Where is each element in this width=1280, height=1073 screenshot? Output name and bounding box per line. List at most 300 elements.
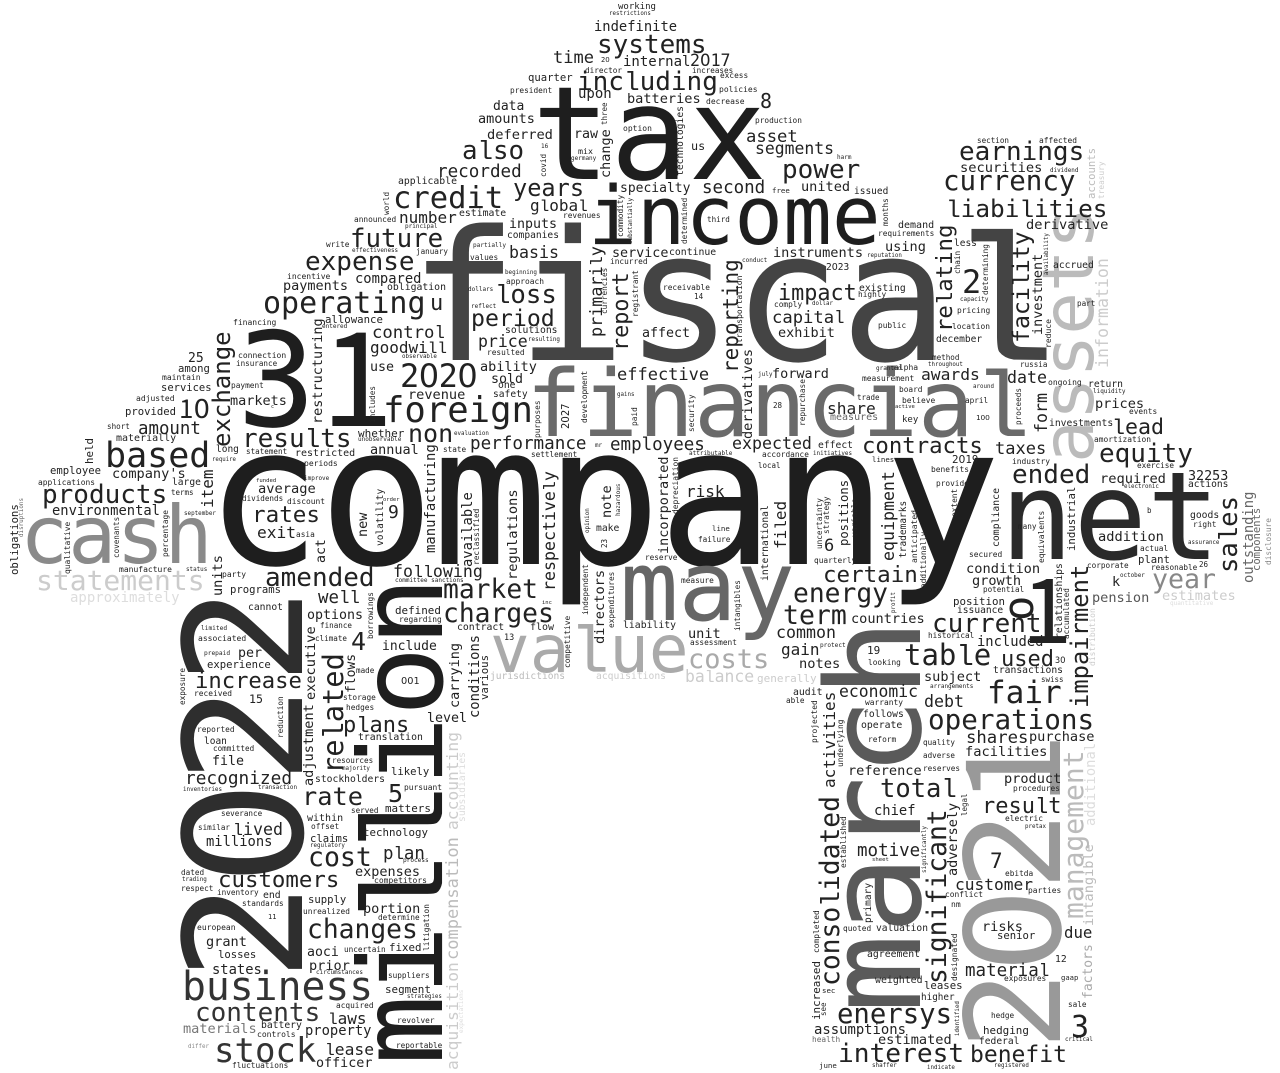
cluster: right eave words: relationships: [1054, 563, 1065, 639]
word: assets: assets: [1027, 207, 1110, 463]
cluster: left wall words: increase: [195, 668, 302, 694]
cluster: right eave words: october: [1120, 573, 1145, 579]
cluster: left roof words: provided: [125, 406, 176, 418]
cluster: roof peak words: companies: [507, 230, 559, 241]
cluster: central words: reclassified: [472, 509, 481, 565]
cluster: left roof words: obligations: [8, 504, 21, 575]
cluster: left roof words: require: [212, 457, 237, 463]
cluster: left wall words: rate: [302, 782, 363, 811]
cluster: left wall words: subsidiaries: [457, 752, 468, 822]
cluster: left roof words: covenants: [112, 517, 121, 558]
cluster: right wall words: assumptions: [814, 1022, 906, 1038]
cluster: right of centre words: countries: [851, 611, 925, 627]
cluster: right wall words: procedures: [1013, 784, 1060, 793]
cluster: right eave words: year: [1152, 564, 1216, 595]
cluster: left wall words: suppliers: [388, 971, 430, 980]
cluster: roof peak words: free: [772, 186, 790, 195]
cluster: left wall words: prepaid: [204, 650, 230, 657]
cluster: left roof words: amount: [138, 419, 201, 439]
cluster: right wall words: adversely: [945, 803, 961, 876]
cluster: right of centre words: notes: [799, 656, 840, 672]
cluster: right of centre words: trademarks: [898, 501, 909, 558]
cluster: roof peak words: january: [416, 247, 448, 256]
cluster: left roof words: funded: [256, 478, 276, 484]
cluster: roof peak words: effectiveness: [352, 248, 398, 254]
cluster: right of centre words: 28: [773, 401, 783, 410]
cluster: upper right words: relating: [932, 225, 959, 332]
cluster: right wall words: completed: [812, 910, 821, 953]
cluster: left roof words: operating: [263, 286, 426, 321]
cluster: left roof words: disruptions: [19, 498, 25, 537]
cluster: right eave words: [993, 415, 1273, 708]
word: may: may: [620, 530, 795, 643]
cluster: roof peak words: time: [553, 48, 594, 68]
cluster: central words: impact: [778, 281, 857, 306]
cluster: central words: use: [370, 360, 394, 375]
cluster: left roof words: maintain: [162, 373, 201, 382]
cluster: left wall words: revolver: [397, 1016, 435, 1025]
cluster: right of centre words: key: [902, 415, 919, 425]
cluster: roof peak words: 2017: [690, 51, 731, 70]
cluster: right of centre words: contracts: [862, 433, 983, 459]
cluster: right wall words: agreement: [867, 949, 920, 960]
cluster: left wall words: related: [316, 653, 352, 774]
word: tax: tax: [532, 58, 767, 210]
cluster: left wall words: standards: [242, 899, 284, 908]
cluster: left wall words: customers: [218, 867, 339, 893]
cluster: roof peak words: germany: [571, 155, 597, 162]
cluster: upper right words: accrued: [1053, 260, 1094, 271]
cluster: left wall words: made: [356, 666, 375, 675]
cluster: right eave words: components: [1251, 508, 1263, 571]
cluster: right wall words: operate: [861, 720, 902, 731]
cluster: left wall words: similar: [198, 823, 230, 832]
cluster: upper right words: liquidity: [1093, 388, 1126, 395]
cluster: left roof words: short: [107, 422, 130, 431]
cluster: left wall words: reduction: [276, 696, 285, 738]
cluster: left wall words: translation: [358, 732, 423, 743]
cluster: left wall words: accounting: [443, 732, 462, 830]
cluster: left roof words: large: [172, 477, 201, 488]
cluster: left wall words: offset: [311, 822, 339, 831]
cluster: right eave words: distribution: [1088, 608, 1097, 666]
cluster: upper right words: investments: [1049, 418, 1113, 429]
cluster: left wall words: stockholders: [315, 774, 385, 785]
word: statements: statements: [36, 564, 205, 597]
cluster: right wall words: shares: [966, 728, 1028, 748]
cluster: central words: 14: [694, 292, 704, 301]
cluster: central words: transportation: [735, 275, 744, 343]
cluster: left wall words: litigation: [422, 904, 431, 951]
cluster: left wall words: loan: [204, 736, 227, 747]
cluster: upper right words: section: [977, 136, 1009, 145]
cluster: roof peak words: president: [510, 86, 552, 95]
cluster: right eave words: outstanding: [1241, 492, 1257, 583]
cluster: left wall words: 4: [351, 627, 366, 656]
cluster: left roof words: qualitative: [63, 521, 72, 574]
cluster: upper right words: investment: [1030, 254, 1046, 335]
cluster: central words: period: [471, 305, 555, 332]
cluster: right of centre words: provide: [936, 479, 969, 488]
cluster: central words: market: [443, 575, 538, 605]
cluster: right wall words: intangible: [1081, 844, 1097, 926]
cluster: central words: reflect: [471, 303, 497, 310]
cluster: right eave words: ended: [1012, 460, 1090, 490]
cluster: left wall words: losses: [218, 949, 256, 961]
cluster: roof peak words: systems: [597, 30, 707, 60]
cluster: left wall words: end: [263, 890, 281, 901]
cluster: right eave words: exercise: [1137, 461, 1174, 470]
cluster: left wall words: inventory: [217, 888, 259, 897]
cluster: right wall words: gaap: [1061, 973, 1078, 982]
cluster: central words: non: [408, 419, 453, 448]
word: financial: financial: [526, 350, 1030, 464]
cluster: central words: performance: [470, 434, 587, 454]
cluster: roof peak words: estimate: [459, 208, 506, 219]
cluster: right wall words: critical: [1065, 1037, 1093, 1043]
cluster: upper right words: method: [932, 353, 959, 362]
cluster: roof peak words: also: [462, 136, 524, 167]
word: value: value: [490, 611, 689, 692]
cluster: right of centre words: profit: [891, 592, 897, 613]
cluster: left roof words: improve: [304, 475, 330, 482]
cluster: left wall words: plans: [343, 713, 409, 739]
cluster: left wall words: severance: [221, 809, 263, 818]
cluster: left roof words: party: [222, 570, 246, 579]
cluster: central words: order: [383, 497, 400, 503]
cluster: right wall words: 7: [990, 849, 1003, 873]
cluster: right eave words: reasonable: [1151, 563, 1198, 572]
cluster: central words: competitive: [563, 615, 572, 668]
cluster: left wall words: technology: [363, 826, 429, 839]
cluster: upper right words: availability: [1044, 233, 1050, 275]
cluster: central words: risk: [686, 482, 725, 501]
cluster: right wall words: valuation: [876, 923, 928, 934]
cluster: central words: committee sanctions: [395, 577, 464, 584]
cluster: left wall words: limited: [201, 625, 227, 632]
cluster: left roof words: adjusted: [136, 394, 175, 403]
cluster: upper right words: treasury: [1097, 161, 1106, 199]
cluster: central words: depreciation: [671, 457, 680, 514]
cluster: roof peak words: third: [707, 215, 730, 224]
cluster: roof peak words: inputs: [509, 217, 557, 232]
cluster: roof peak words: indefinite: [594, 19, 677, 35]
cluster: right wall words: higher: [921, 992, 955, 1003]
cluster: upper right words: throughout: [928, 362, 963, 368]
cluster: left wall words: acquisition: [443, 962, 462, 1070]
cluster: roof peak words: 2023: [826, 262, 849, 273]
cluster: central words: inc: [542, 600, 552, 606]
cluster: roof peak words: covid: [539, 154, 548, 177]
cluster: right of centre words: growth: [972, 573, 1021, 589]
cluster: left roof words: exit: [257, 523, 296, 542]
cluster: left roof words: act: [314, 539, 329, 563]
cluster: left wall words: millions: [206, 834, 272, 850]
cluster: roof peak words: decrease: [706, 97, 745, 106]
cluster: left wall words: cannot: [248, 602, 283, 613]
cluster: right of centre words: extent: [950, 489, 959, 517]
cluster: right of centre words: lines: [872, 455, 894, 464]
cluster: left wall words: controls: [257, 1030, 296, 1039]
cluster: central words: one: [498, 380, 516, 391]
cluster: roof peak words: announced: [354, 215, 396, 224]
cluster: roof peak words: power: [782, 155, 860, 185]
cluster: upper right words: board: [899, 385, 922, 394]
cluster: upper right words: around: [973, 384, 994, 390]
cluster: left wall words: 15: [249, 692, 263, 706]
cluster: left wall words: committed: [213, 744, 254, 753]
cluster: upper right words: less: [954, 238, 977, 249]
cluster: central words: gains: [617, 392, 634, 398]
cluster: right wall words: facilities: [965, 744, 1047, 760]
cluster: right of centre words: uncertainty: [815, 498, 824, 549]
cluster: left wall words: inventories: [183, 787, 222, 793]
cluster: upper right words: reduce: [1044, 319, 1053, 348]
cluster: central words: 2027: [560, 404, 572, 429]
cluster: left roof words: asia: [296, 530, 315, 539]
cluster: left wall words: respect: [181, 884, 213, 893]
cluster: left roof words: dividends: [242, 494, 283, 503]
cluster: right of centre words: accordance: [762, 450, 809, 459]
cluster: left roof words: exchange: [208, 331, 236, 447]
cluster: upper right words: prices: [1095, 396, 1144, 412]
cluster: upper right words: form: [1032, 393, 1051, 433]
cluster: left wall words: fixed: [389, 941, 422, 954]
cluster: left roof words: expense: [305, 247, 415, 277]
cluster: central words: mr: [595, 443, 603, 449]
cluster: roof peak words: specialty: [620, 181, 691, 196]
cluster: central words: liability: [623, 620, 676, 631]
cluster: central words: beginning: [505, 270, 537, 276]
cluster: left wall words: contents: [195, 998, 320, 1028]
cluster: left wall words: borrowings: [366, 592, 375, 639]
cluster: roof peak words: mix: [578, 146, 593, 156]
cluster: upper right words: information: [1093, 258, 1112, 368]
cluster: right eave words: industrial: [1065, 487, 1078, 551]
cluster: central words: hazardous: [615, 483, 622, 516]
cluster: central words: contract: [457, 622, 504, 633]
cluster: roof peak words: demand: [898, 220, 934, 231]
cluster: right of centre words: international: [760, 505, 771, 581]
cluster: left wall words: transaction: [258, 785, 297, 791]
cluster: roof peak words: write: [326, 240, 350, 249]
cluster: left roof words: percentage: [161, 510, 170, 557]
cluster: right wall words: purchase: [1029, 729, 1094, 745]
cluster: upper right words: pricing: [957, 306, 991, 315]
cluster: roof peak words: years: [513, 174, 584, 202]
cluster: roof peak words: deferred: [487, 127, 553, 143]
cluster: right of centre words: failure: [698, 535, 731, 544]
cluster: right eave words: assurance: [1188, 540, 1220, 546]
cluster: right of centre words: strategy: [822, 496, 831, 534]
word: march: march: [798, 619, 951, 1013]
cluster: right wall words: projected: [810, 700, 819, 743]
cluster: left wall words: reportable: [396, 1041, 443, 1050]
cluster: right of centre words: gain: [781, 640, 820, 659]
cluster: right of centre words: audit: [793, 687, 822, 698]
cluster: central words: regarding: [399, 615, 442, 624]
cluster: central words: security: [687, 394, 696, 432]
cluster: upper right words: measurement: [862, 374, 914, 383]
cluster: roof peak words: principal: [405, 223, 438, 230]
cluster: left wall words: 5: [388, 779, 403, 808]
cluster: right of centre words: current: [932, 609, 1042, 639]
cluster: right eave words: actions: [1188, 479, 1228, 490]
cluster: left wall words: european: [197, 923, 236, 932]
cluster: roof peak words: harm: [837, 154, 852, 161]
cluster: central words: 23: [600, 539, 609, 548]
cluster: central words: jurisdictions: [490, 671, 565, 682]
cluster: left wall words: stock: [214, 1031, 316, 1071]
cluster: central words: foreign: [383, 390, 533, 431]
cluster: central words: available: [460, 492, 476, 567]
cluster: right of centre words: historical: [928, 631, 974, 640]
cluster: central words: defined: [395, 604, 441, 617]
cluster: right of centre words: condition: [966, 561, 1040, 577]
cluster: central words: reporting: [719, 259, 743, 373]
cluster: left roof words: based: [105, 436, 210, 476]
cluster: central words: development: [580, 371, 589, 423]
cluster: left wall words: expenses: [355, 864, 420, 880]
cluster: upper right words: earnings: [959, 137, 1084, 167]
cluster: left wall words: determine: [378, 913, 420, 922]
cluster: central words: make: [596, 523, 619, 534]
cluster: left roof words: units: [210, 555, 226, 596]
cluster: left wall words: regulatory: [310, 843, 345, 849]
cluster: right eave words: goods: [1190, 510, 1219, 521]
cluster: central words: independent: [581, 564, 590, 615]
cluster: left roof words: financing: [233, 318, 277, 327]
cluster: central words: whether: [358, 427, 405, 440]
cluster: left roof words: entered: [322, 323, 348, 330]
cluster: left wall words: prior: [309, 958, 350, 974]
cluster: right wall words: due: [1064, 923, 1092, 942]
cluster: left roof words: average: [258, 481, 316, 497]
cluster: roof peak words: 20: [601, 56, 610, 64]
word: company: company: [205, 384, 997, 610]
cluster: right eave words: electronic: [1124, 484, 1159, 490]
cluster: roof peak words: instruments: [773, 245, 863, 261]
cluster: right wall words: parties: [1028, 886, 1061, 895]
cluster: left wall words: storage: [343, 693, 376, 702]
cluster: right of centre words: equipment: [879, 471, 898, 561]
cluster: right wall words: motive: [857, 841, 920, 861]
cluster: right eave words: industry: [1012, 457, 1050, 466]
cluster: right of centre words: quarterly: [814, 556, 857, 565]
cluster: upper right words: russia: [1020, 360, 1047, 369]
cluster: roof peak words: issued: [854, 186, 888, 197]
cluster: right eave words: addition: [1098, 529, 1164, 545]
cluster: upper right words: chain: [953, 251, 962, 274]
cluster: roof peak words: 8: [760, 89, 772, 113]
cluster: central words: carrying: [447, 643, 463, 708]
cluster: left wall words: [178, 563, 468, 1071]
cluster: right of centre words: economic: [839, 682, 918, 701]
cluster: right of centre words: common: [776, 623, 836, 642]
cluster: right eave words: sales: [1214, 496, 1245, 573]
cluster: central words: note: [599, 485, 615, 518]
cluster: central words: derivatives: [740, 349, 756, 439]
cluster: right wall words: leases: [924, 979, 963, 992]
cluster: central words: conditions: [467, 635, 483, 718]
cluster: right wall words: [810, 692, 1099, 1071]
cluster: right eave words: amortization: [1094, 435, 1151, 444]
cluster: roof peak words: conduct: [742, 257, 768, 264]
cluster: right eave words: equity: [1099, 439, 1193, 469]
cluster: central words: costs: [688, 644, 769, 675]
cluster: left wall words: options: [307, 608, 363, 623]
cluster: central words: manufacturing: [423, 444, 439, 553]
cluster: left wall words: circumstances: [316, 969, 363, 976]
cluster: right of centre words: table: [904, 638, 991, 674]
cluster: roof peak words: service: [612, 246, 668, 261]
cluster: central words: price: [478, 332, 528, 351]
cluster: roof peak words: number: [399, 208, 457, 227]
cluster: right of centre words: effect: [818, 440, 853, 451]
cluster: roof peak words: production: [755, 116, 802, 125]
cluster: right of centre words: 6: [824, 536, 834, 556]
cluster: right eave words: estimates: [1162, 588, 1236, 604]
cluster: right wall words: follows: [863, 709, 904, 720]
cluster: left wall words: received: [194, 689, 232, 698]
cluster: roof peak words: option: [623, 124, 652, 133]
cluster: left roof words: restructuring: [310, 318, 326, 424]
cluster: central words: safety: [493, 389, 528, 400]
cluster: central words: reserve: [645, 553, 678, 562]
cluster: right wall words: factors: [1081, 944, 1096, 999]
cluster: right eave words: accumulated: [1062, 588, 1071, 639]
cluster: right of centre words: measures: [830, 412, 878, 423]
cluster: left wall words: dated: [181, 868, 204, 877]
cluster: central words: directors: [592, 570, 608, 644]
cluster: right of centre words: potential: [983, 585, 1024, 594]
cluster: left roof words: periods: [304, 459, 338, 468]
cluster: left wall words: resources: [332, 756, 373, 765]
cluster: right eave words: plant: [1138, 554, 1170, 566]
cluster: right of centre words: used: [1001, 647, 1054, 672]
cluster: upper right words: liabilities: [946, 194, 1107, 225]
cluster: left wall words: portion: [363, 901, 420, 917]
cluster: right of centre words: believe: [902, 396, 936, 405]
cluster: right eave words: b: [1147, 506, 1152, 515]
cluster: upper right words: dividend: [1050, 168, 1078, 174]
cluster: left wall words: strategies: [407, 994, 442, 1000]
cluster: left roof words: payments: [283, 278, 348, 294]
cluster: right wall words: june: [819, 1061, 837, 1070]
cluster: roof peak words: global: [530, 196, 588, 216]
cluster: left wall words: lease: [325, 1040, 374, 1060]
cluster: central words: capital: [772, 308, 844, 329]
cluster: central words: revenue: [408, 387, 465, 403]
cluster: left wall words: process: [403, 857, 429, 864]
cluster: left wall words: fluctuations: [232, 1061, 288, 1070]
cluster: left wall words: battery: [261, 1020, 302, 1031]
cluster: left wall words: file: [212, 754, 244, 769]
cluster: right of centre words: april: [965, 396, 988, 405]
cluster: central words: charges: [443, 599, 554, 629]
cluster: left wall words: majority: [342, 766, 370, 772]
cluster: central words: 9: [388, 502, 399, 523]
cluster: right eave words: k: [1112, 574, 1120, 590]
cluster: right of centre words: issuance: [957, 605, 1003, 616]
cluster: right eave words: actual: [1140, 544, 1168, 553]
cluster: right of centre words: secured: [969, 550, 1003, 559]
cluster: right of centre words: energy: [793, 579, 888, 609]
cluster: central words: goodwill: [370, 338, 447, 358]
cluster: right wall words: total: [880, 774, 957, 805]
cluster: right wall words: quoted: [843, 924, 871, 933]
cluster: left wall words: executive: [303, 626, 319, 700]
